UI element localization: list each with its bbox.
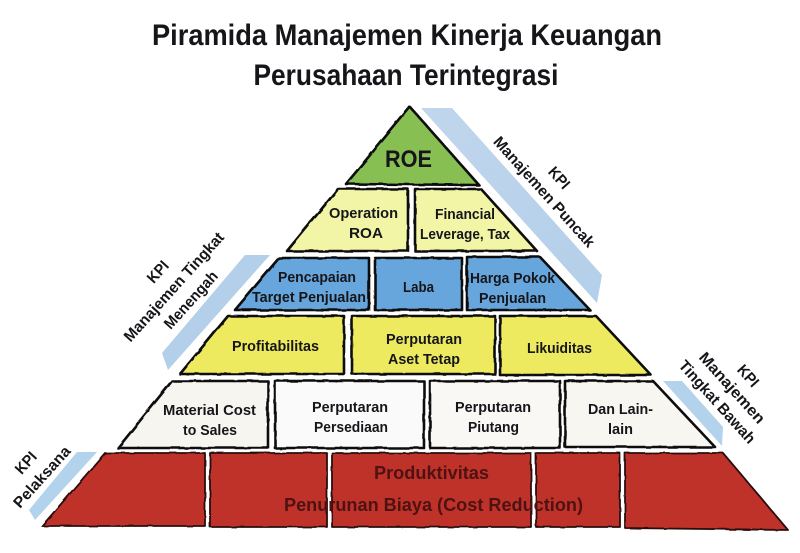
label: KPI Manajemen Tingkat Menengah: KPI xyxy=(144,258,173,287)
label: KPI Manajemen Puncak: KPI xyxy=(544,164,573,193)
band: KPI Pelaksana xyxy=(29,452,97,520)
tier 4: Perputaran Aset Tetap: Perputaran xyxy=(386,331,462,348)
band: KPI Manajemen Tingkat Bawah xyxy=(663,381,723,446)
band: KPI Manajemen Tingkat Menengah xyxy=(162,255,270,370)
tier 4: Likuiditas xyxy=(500,316,651,375)
label: KPI Manajemen Tingkat Bawah: Tingkat Bawah xyxy=(675,357,758,447)
tier 5: Perputaran Piutang xyxy=(430,381,560,448)
tier 3: Pencapaian Target Penjualan: Target Penjualan xyxy=(252,289,366,306)
tier 5: Perputaran Piutang: Piutang xyxy=(468,419,519,436)
tier 6: Produktivitas and Penurunan Biaya: Penurunan Biaya (Cost Reduction) xyxy=(284,495,583,515)
tier 5: Material Cost to Sales: to Sales xyxy=(183,422,237,439)
tier 5: Perputaran Piutang: Perputaran xyxy=(455,399,531,416)
band: KPI Manajemen Puncak xyxy=(421,108,602,303)
title xyxy=(152,19,662,92)
tier 6: Produktivitas and Penurunan Biaya: Produktivitas xyxy=(374,463,489,483)
tier 6: Produktivitas and Penurunan Biaya xyxy=(42,453,788,530)
tier 5: Perputaran Persediaan xyxy=(275,381,424,448)
tier 4: Likuiditas: Likuiditas xyxy=(527,340,592,357)
tier 4: Profitabilitas: Profitabilitas xyxy=(232,338,319,355)
tier 3: Pencapaian Target Penjualan xyxy=(235,258,369,310)
label: KPI Manajemen Puncak: Manajemen Puncak xyxy=(489,134,598,251)
tier 3: Harga Pokok Penjualan xyxy=(467,257,590,310)
tier 3: Pencapaian Target Penjualan: Pencapaian xyxy=(278,269,356,286)
tier 5: Dan Lain-lain: lain xyxy=(608,421,633,438)
tier 5: Dan Lain-lain xyxy=(565,381,715,447)
tier 1: ROE xyxy=(346,107,479,185)
title: Perusahaan Terintegrasi xyxy=(254,59,558,92)
tier 5: Dan Lain-lain: Dan Lain- xyxy=(588,401,653,418)
tier 2: Financial Leverage, Tax xyxy=(415,189,537,251)
tier 3: Harga Pokok Penjualan: Penjualan xyxy=(479,290,546,307)
label: KPI Manajemen Tingkat Bawah: Manajemen xyxy=(695,349,768,427)
tier 4: Perputaran Aset Tetap: Aset Tetap xyxy=(388,351,460,368)
tier 4: Perputaran Aset Tetap xyxy=(352,316,495,374)
label: KPI Manajemen Tingkat Menengah: Menengah xyxy=(161,268,222,333)
label: KPI Manajemen Tingkat Bawah: KPI xyxy=(733,362,762,391)
tier 2: Financial Leverage, Tax: Leverage, Tax xyxy=(420,226,511,243)
tier 5: Perputaran Persediaan: Persediaan xyxy=(314,419,388,436)
tier 2: Operation ROA: ROA xyxy=(349,225,383,242)
tier 3: Harga Pokok Penjualan: Harga Pokok xyxy=(470,270,556,287)
tier 4: Profitabilitas xyxy=(180,316,344,374)
tier 2: Operation ROA xyxy=(287,189,408,251)
tier 3: Laba xyxy=(375,258,462,310)
label: KPI Pelaksana: Pelaksana xyxy=(10,443,75,512)
title: Piramida Manajemen Kinerja Keuangan xyxy=(152,19,662,52)
tier 1: ROE: ROE xyxy=(385,146,432,173)
tier 2: Operation ROA: Operation xyxy=(329,205,398,222)
tier 5: Material Cost to Sales: Material Cost xyxy=(163,402,256,419)
label: KPI Pelaksana: KPI xyxy=(12,449,41,478)
tier 3: Laba: Laba xyxy=(403,279,435,296)
tier 2: Financial Leverage, Tax: Financial xyxy=(435,206,495,223)
label: KPI Manajemen Tingkat Menengah: Manajemen Tingkat xyxy=(121,229,228,345)
tier 5: Perputaran Persediaan: Perputaran xyxy=(312,399,388,416)
tier 5: Material Cost to Sales xyxy=(118,381,268,448)
